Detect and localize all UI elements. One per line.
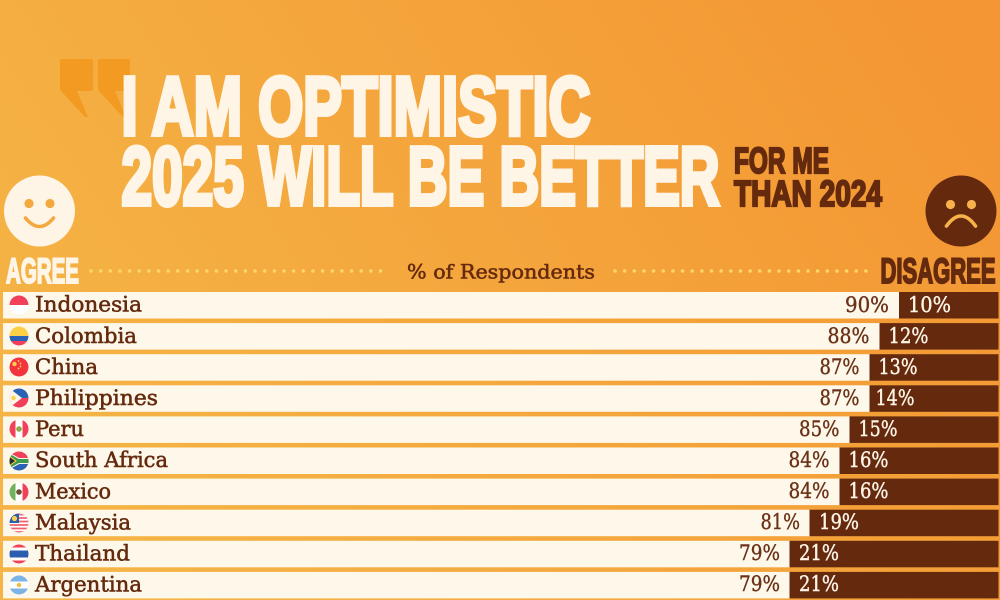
row: Mexico: 16% xyxy=(848,479,888,503)
row: Malaysia xyxy=(3,510,998,536)
row: China: 87% xyxy=(820,355,860,379)
row: Colombia: 88% xyxy=(828,324,870,348)
row: Indonesia: 90% xyxy=(845,293,889,317)
row: Malaysia: Malaysia xyxy=(35,510,131,534)
row: Peru xyxy=(3,416,998,443)
row: Colombia: Colombia xyxy=(35,324,137,348)
row: Argentina: 79% xyxy=(739,572,780,596)
row: Mexico xyxy=(3,479,998,505)
flag: China xyxy=(9,357,29,377)
row: Argentina: 21% xyxy=(799,572,839,596)
row: South Africa: South Africa xyxy=(35,448,168,472)
icon: smiling face xyxy=(4,176,75,246)
row: Thailand xyxy=(3,541,998,567)
row: Malaysia: 81% xyxy=(760,510,800,534)
row: Philippines xyxy=(3,385,998,412)
row: Peru: 85% xyxy=(799,417,840,441)
row: Malaysia: 19% xyxy=(819,510,859,534)
title: I AM OPTIMISTIC xyxy=(122,60,590,152)
flag: Peru xyxy=(9,419,29,439)
row: Mexico: 84% xyxy=(788,479,830,503)
subtitle: THAN 2024 xyxy=(734,173,882,214)
row: Philippines: 87% xyxy=(820,386,860,410)
flag: Philippines xyxy=(9,388,29,408)
title: 2025 WILL BE BETTER xyxy=(122,130,720,222)
row: China xyxy=(3,354,998,381)
row: South Africa: 84% xyxy=(788,448,830,472)
row: Colombia xyxy=(3,323,998,350)
row: South Africa xyxy=(3,448,998,474)
axis label: % of Respondents xyxy=(407,260,595,284)
icon: frowning face xyxy=(926,176,996,246)
flag: Malaysia xyxy=(9,513,29,533)
row: South Africa: 16% xyxy=(848,448,888,472)
row: Thailand: Thailand xyxy=(35,542,130,566)
row: Thailand: 21% xyxy=(799,541,839,565)
subtitle xyxy=(734,140,882,214)
row: Mexico: Mexico xyxy=(35,479,111,503)
row: Argentina xyxy=(3,572,998,598)
row: Philippines: Philippines xyxy=(35,386,158,410)
row: Indonesia: 10% xyxy=(908,293,951,317)
row: Peru: 15% xyxy=(858,417,898,441)
row: Indonesia xyxy=(3,292,998,318)
flag: Argentina xyxy=(9,575,29,595)
row: Colombia: 12% xyxy=(888,324,928,348)
row: Philippines: 14% xyxy=(876,386,914,410)
row: Indonesia: Indonesia xyxy=(35,293,142,317)
row: Peru: Peru xyxy=(35,417,84,441)
flag: Thailand xyxy=(9,544,29,564)
agree label: AGREE xyxy=(6,252,79,291)
subtitle: FOR ME xyxy=(734,140,829,181)
row: China: 13% xyxy=(878,355,918,379)
row: China: China xyxy=(35,355,98,379)
title xyxy=(122,60,720,222)
icon: quotation marks xyxy=(60,59,130,117)
row: Thailand: 79% xyxy=(739,541,780,565)
flag: Colombia xyxy=(9,326,29,346)
flag: South Africa xyxy=(9,451,29,471)
flag: Mexico xyxy=(9,482,29,502)
flag: Indonesia xyxy=(9,295,29,315)
row: Argentina: Argentina xyxy=(34,573,142,597)
